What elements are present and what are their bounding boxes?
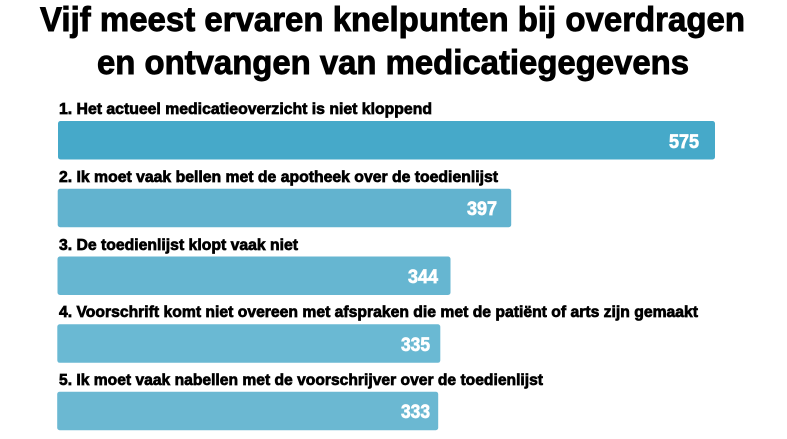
- item 5: [57, 372, 544, 430]
- item 3: 3. De toedienlijst klopt vaak niet: [59, 237, 299, 254]
- item 3: [58, 237, 450, 295]
- title: Vijf meest ervaren knelpunten bij overdragen: [40, 1, 745, 39]
- item 2: 397: [467, 199, 497, 220]
- item 5: 333: [401, 402, 430, 423]
- item 5: 5. Ik moet vaak nabellen met de voorschrijver over de toedienlijst: [59, 372, 544, 389]
- item 3: 344: [408, 267, 438, 288]
- item 4: [57, 304, 699, 363]
- item 1: [58, 101, 715, 160]
- item 4: 4. Voorschrift komt niet overeen met afspraken die met de patiënt of arts zijn gemaakt: [59, 304, 699, 321]
- item 1: 1. Het actueel medicatieoverzicht is niet kloppend: [59, 101, 432, 118]
- item 4: 335: [401, 335, 430, 356]
- title: [40, 1, 745, 82]
- item 2: 2. Ik moet vaak bellen met de apotheek over de toedienlijst: [59, 169, 499, 186]
- item 2: [58, 169, 511, 227]
- item 1: 575: [669, 132, 699, 153]
- title: en ontvangen van medicatiegegevens: [97, 44, 689, 82]
- bar chart: [57, 101, 715, 430]
